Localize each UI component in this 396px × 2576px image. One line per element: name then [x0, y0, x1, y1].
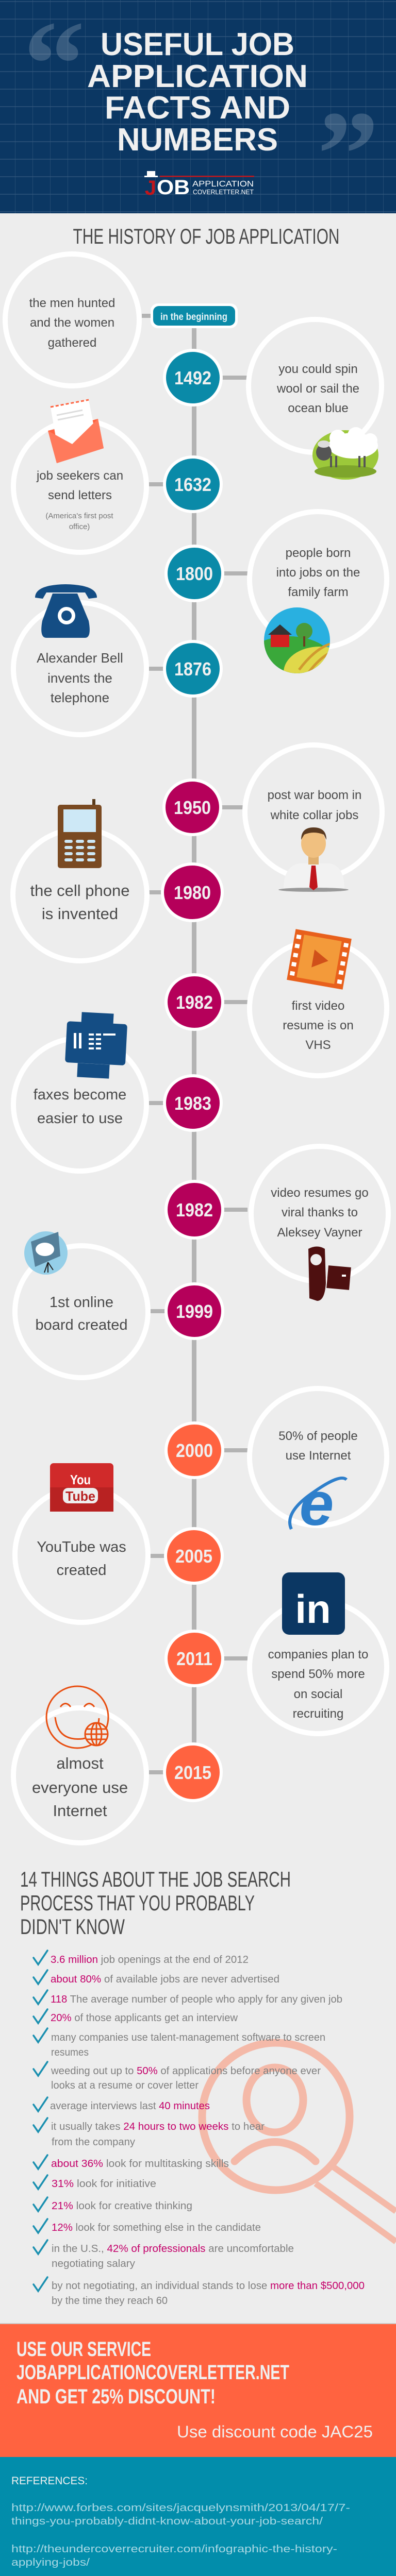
text: youtube: YouTube was	[37, 1539, 126, 1555]
year 1950	[164, 780, 221, 835]
year 1999: 1999	[176, 1301, 213, 1322]
checklist: looks at a resume or cover letter	[51, 2080, 199, 2091]
year 2000	[166, 1423, 223, 1478]
icon: linkedin: in	[295, 1586, 331, 1632]
year 2011	[166, 1631, 223, 1686]
text: social recruiting: spend 50% more	[271, 1667, 365, 1681]
text: Aleksey Vayner: viral thanks to	[282, 1206, 358, 1219]
logo: APPLICATION	[192, 180, 254, 189]
year 1950: 1950	[174, 797, 211, 818]
pill: in the beginning	[151, 303, 238, 328]
checklist: in the U.S., 42% of professionals are uncomfortable	[52, 2243, 294, 2255]
logo: COVERLETTER.NET	[193, 188, 254, 196]
text: men hunted: and the women	[30, 316, 114, 330]
text: letters	[36, 469, 123, 531]
year 1980: 1980	[174, 882, 211, 903]
logo	[144, 171, 254, 199]
checklist: average interviews last 40 minutes	[50, 2100, 210, 2112]
text: cell phone: the cell phone	[30, 882, 130, 900]
logo: OB	[157, 176, 190, 199]
year 1800: 1800	[176, 563, 213, 584]
checklist: about 36% look for multitasking skills	[51, 2158, 229, 2170]
text: online board: board created	[36, 1317, 127, 1333]
year 1983: 1983	[174, 1093, 211, 1114]
icon: envelope	[48, 400, 104, 463]
timeline	[5, 254, 388, 1843]
references panel: http://theundercoverrecruiter.com/infographic-the-history-	[11, 2544, 337, 2555]
icon: youtube	[50, 1463, 113, 1512]
icon: telephone	[35, 584, 97, 638]
icon: cell phone	[58, 799, 102, 868]
year 1632	[164, 457, 221, 512]
icon: fax machine	[65, 1012, 127, 1079]
pill: in the beginning: in the beginning	[160, 312, 227, 323]
icon: linkedin	[282, 1572, 345, 1635]
checklist: negotiating salary	[52, 2258, 135, 2269]
checklist: many companies use talent-management software to screen	[51, 2032, 325, 2043]
text: everyone internet	[32, 1754, 128, 1820]
text: social recruiting	[268, 1648, 368, 1721]
checklist: 31% look for initiative	[52, 2178, 156, 2190]
text: white collar: post war boom in	[268, 788, 361, 802]
icon: video camera	[308, 1247, 351, 1301]
checklist: by the time they reach 60	[52, 2295, 168, 2307]
icon: right quote mark: ”	[317, 86, 379, 223]
text: men hunted: the men hunted	[29, 296, 115, 310]
text: internet 50%: 50% of people	[278, 1429, 358, 1443]
year 1492	[164, 350, 221, 405]
text: VHS: resume is on	[283, 1019, 354, 1032]
text: men hunted: gathered	[48, 336, 96, 350]
promo banner	[0, 2323, 396, 2457]
checklist: about 80% of available jobs are never advertised	[51, 1974, 279, 1985]
text: family farm: into jobs on the	[276, 566, 360, 580]
title: USEFUL JOB	[101, 27, 294, 62]
year 2005	[166, 1529, 222, 1583]
year 1876: 1876	[174, 658, 211, 680]
text: VHS: VHS	[305, 1038, 331, 1052]
text: family farm: people born	[286, 546, 351, 560]
text: internet 50%	[278, 1429, 358, 1463]
icon: farm	[264, 607, 330, 673]
checklist: it usually takes 24 hours to two weeks to hear	[51, 2121, 265, 2132]
text: cell phone	[30, 882, 130, 923]
title: FACTS AND	[105, 90, 290, 126]
year 1999	[166, 1284, 223, 1338]
checklist	[34, 1951, 365, 2307]
year 1982	[166, 975, 223, 1029]
year 1876	[164, 641, 221, 696]
heading: 14 things	[20, 1867, 291, 1939]
text: cell phone: is invented	[42, 905, 118, 923]
references panel: REFERENCES:	[11, 2475, 88, 2487]
year 1982: 1982	[176, 992, 213, 1013]
heading: 14 things: DIDN'T KNOW	[20, 1914, 125, 1939]
year 1492: 1492	[174, 367, 211, 388]
check marks	[34, 1951, 47, 2291]
checklist: 118 The average number of people who apply for any given job	[51, 1994, 342, 2005]
icon: youtube: Tube	[65, 1488, 95, 1504]
header panel	[0, 0, 396, 223]
text: spin wool: wool or sail the	[276, 382, 359, 396]
text: family farm	[276, 546, 360, 599]
logo: J	[145, 177, 156, 199]
checklist: 3.6 million job openings at the end of 2012	[51, 1954, 249, 1965]
timeline spine	[192, 325, 196, 1772]
text: internet 50%: use Internet	[286, 1449, 351, 1463]
references panel: applying-jobs/	[11, 2557, 90, 2568]
icon: sheep	[312, 427, 378, 480]
text: letters: office)	[69, 522, 90, 531]
promo banner: JOBAPPLICATIONCOVERLETTER.NET	[16, 2361, 289, 2384]
icon: internet explorer	[290, 1469, 346, 1538]
text: youtube	[37, 1539, 126, 1579]
promo banner: USE OUR SERVICE	[16, 2338, 151, 2361]
text: youtube: created	[57, 1562, 106, 1579]
icon: businessman	[278, 827, 349, 892]
text: social recruiting: recruiting	[293, 1707, 343, 1721]
text: VHS: first video	[292, 999, 344, 1013]
icon: film strip	[287, 929, 352, 990]
year 2000: 2000	[176, 1440, 213, 1461]
year 1982 second	[166, 1181, 223, 1238]
checklist: 12% look for something else in the candidate	[52, 2222, 261, 2233]
heading: 14 things: PROCESS THAT YOU PROBABLY	[20, 1891, 255, 1915]
checklist: resumes	[51, 2047, 89, 2058]
checklist: weeding out up to 50% of applications before anyone ever	[51, 2065, 321, 2077]
text: faxes: easier to use	[37, 1110, 123, 1127]
checklist: from the company	[52, 2137, 135, 2148]
text: spin wool: you could spin	[278, 362, 358, 376]
references panel: http://www.forbes.com/sites/jacquelynsmith/2013/04/17/7-	[11, 2502, 350, 2514]
heading: 14 things: 14 THINGS ABOUT THE JOB SEARCH	[20, 1867, 291, 1891]
text: social recruiting: companies plan to	[268, 1648, 368, 1662]
text: everyone internet: almost	[56, 1754, 104, 1772]
year 1980	[162, 864, 222, 921]
text: Aleksey Vayner: video resumes go	[271, 1186, 369, 1200]
text: VHS	[283, 999, 354, 1052]
text: online board: 1st online	[50, 1294, 113, 1311]
event bubbles	[5, 254, 388, 1843]
year 1632: 1632	[174, 474, 211, 495]
text: family farm: family farm	[288, 585, 349, 599]
year 2015	[164, 1744, 221, 1801]
year 1800	[166, 546, 223, 601]
text: letters: job seekers can	[36, 469, 123, 483]
text: Aleksey Vayner: Aleksey Vayner	[277, 1226, 362, 1240]
checklist: by not negotiating, an individual stands to lose more than $500,000	[52, 2280, 365, 2292]
checklist: 20% of those applicants get an interview	[51, 2012, 238, 2024]
title: NUMBERS	[117, 122, 278, 158]
text: faxes: faxes become	[34, 1087, 126, 1103]
text: social recruiting: on social	[294, 1687, 342, 1701]
title: APPLICATION	[87, 59, 308, 94]
checklist: 21% look for creative thinking	[52, 2200, 192, 2212]
references panel	[0, 2457, 396, 2576]
icon: youtube: You	[70, 1472, 91, 1487]
text: everyone internet: Internet	[53, 1802, 107, 1820]
icon: magnifier watermark	[202, 2043, 396, 2242]
text: telephone: invents the	[47, 670, 112, 686]
text: men hunted	[29, 296, 115, 350]
text: letters: send letters	[48, 488, 112, 502]
text: telephone	[37, 650, 123, 705]
connectors	[142, 314, 248, 1774]
discount code: Use discount code JAC25	[177, 2422, 373, 2441]
text: spin wool: ocean blue	[288, 401, 349, 415]
icon: smiley with globe	[46, 1686, 108, 1748]
text: letters: (America's first post	[45, 512, 113, 520]
promo banner: AND GET 25% DISCOUNT!	[16, 2385, 216, 2408]
year 1983	[164, 1076, 221, 1130]
text: telephone: Alexander Bell	[37, 650, 123, 666]
text: online board	[36, 1294, 127, 1333]
references panel: things-you-probably-didnt-know-about-your-job-search/	[11, 2516, 323, 2527]
text: Aleksey Vayner	[271, 1186, 369, 1240]
year 2005: 2005	[175, 1546, 212, 1567]
title	[87, 27, 308, 158]
text: everyone internet: everyone use	[32, 1778, 128, 1797]
text: faxes	[34, 1087, 126, 1127]
text: white collar: white collar jobs	[270, 808, 358, 822]
icon: projector board	[24, 1231, 68, 1275]
year 2011: 2011	[176, 1648, 212, 1669]
year circles	[162, 350, 223, 1801]
text: spin wool	[276, 362, 359, 415]
icon: internet explorer: e	[300, 1469, 334, 1538]
event texts	[29, 296, 369, 1820]
year 1982 second: 1982	[176, 1199, 213, 1221]
text: telephone: telephone	[51, 690, 109, 705]
year 2015: 2015	[174, 1762, 211, 1783]
text: white collar	[268, 788, 361, 822]
